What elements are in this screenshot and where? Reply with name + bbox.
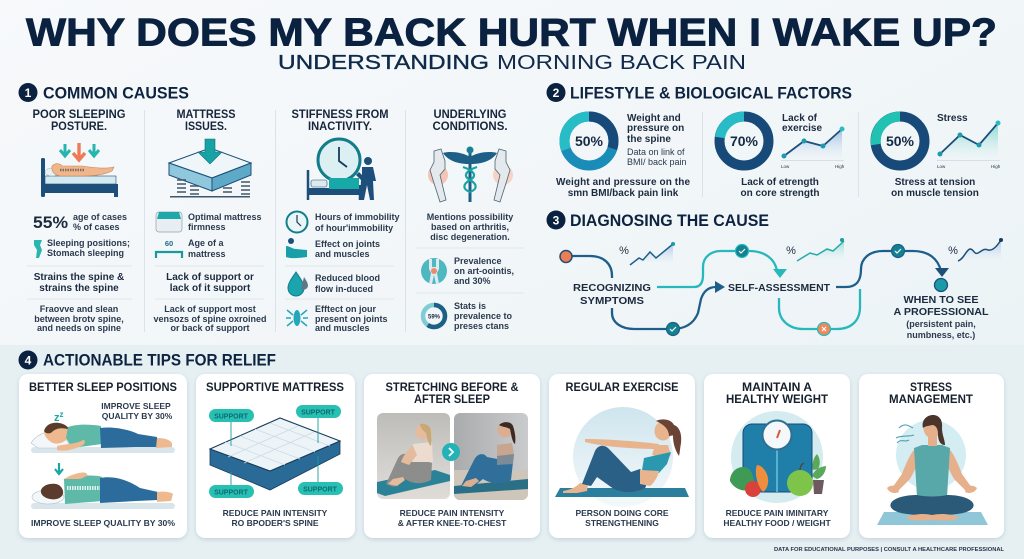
illustration: side sleeper	[31, 423, 175, 453]
step: when to see a professional: WHEN TO SEE	[904, 295, 979, 306]
column: stiffness from inactivity	[285, 107, 400, 333]
subtitle: UNDERSTANDING	[278, 51, 489, 74]
card: maintain a healthy weight	[704, 374, 850, 538]
stat: 55% of cases	[33, 212, 127, 232]
step: when to see a professional: A PROFESSIONAL	[894, 307, 988, 318]
heading: common causes: 1	[25, 86, 32, 100]
factor: weight	[556, 113, 690, 199]
arrow: down	[55, 463, 63, 474]
photo: after stretch	[454, 413, 528, 500]
card: maintain a healthy weight: REDUCE PAIN IMINITARY	[726, 508, 829, 518]
factor: weight: smn BMI/back pain link	[568, 188, 679, 199]
column: mattress issues: MATTRESS	[176, 107, 236, 121]
column: poor sleeping posture: POSTURE.	[51, 119, 107, 133]
step: when to see a professional: numbness, etc.)	[907, 330, 975, 340]
card: stretching	[364, 374, 540, 538]
factor: weight: pressure on	[627, 123, 684, 134]
icon: nerve joint	[286, 310, 308, 326]
column: underlying conditions: preses ctans	[454, 321, 509, 331]
column: stiffness from inactivity: present on joints	[315, 314, 388, 324]
column: stiffness from inactivity: Hours of immobility	[315, 212, 400, 222]
column: stiffness from inactivity: of hour'immobility	[315, 223, 393, 233]
column: mattress issues: firmness	[188, 222, 226, 232]
mini chart 2	[786, 238, 844, 261]
icon: small clock	[286, 212, 308, 232]
card: stress management: MANAGEMENT	[889, 394, 973, 406]
factor: stress: Stress	[937, 113, 968, 124]
labels: support pills: SUPPORT	[214, 490, 249, 496]
card: regular exercise: STRENGTHENING	[585, 518, 659, 528]
column: poor sleeping posture: Strains the spine &	[34, 272, 124, 283]
card: stress management: STRESS	[910, 382, 952, 394]
stat: 55% of cases: age of cases	[73, 212, 127, 222]
card: supportive mattress: REDUCE PAIN INTENSITY	[223, 508, 328, 518]
icon: resting person	[286, 238, 307, 258]
panel: common causes	[18, 83, 524, 333]
illustration: mattress	[210, 418, 340, 490]
card: stress management	[859, 374, 1004, 538]
card: stretching: AFTER SLEEP	[414, 394, 490, 406]
chart: stress trend line: Low	[937, 164, 946, 169]
chart: exercise trend line: High	[835, 164, 845, 169]
factor: stress	[876, 113, 1001, 199]
column: mattress issues: lack of it support	[170, 283, 251, 294]
column: underlying conditions: Stats is	[454, 301, 486, 311]
heading: lifestyle factors: LIFESTYLE & BIOLOGICAL FACTORS	[570, 84, 852, 102]
node: end	[934, 278, 948, 292]
chart: 59% donut: 59%	[428, 314, 441, 320]
step: when to see a professional	[894, 295, 988, 340]
illustration: core exercise	[555, 407, 689, 507]
column: stiffness from inactivity: flow in-duced	[315, 284, 373, 294]
stat: 55% of cases: % of cases	[73, 222, 120, 232]
icon: person in bed with arrows	[41, 143, 118, 197]
footer note: DATA FOR EDUCATIONAL PURPOSES | CONSULT A HEALTHCARE PROFESSIONAL	[774, 547, 1005, 553]
labels: support pills	[209, 405, 343, 498]
card: better sleep positions	[19, 374, 187, 538]
panel: actionable tips	[18, 350, 1005, 553]
column: poor sleeping posture: Fraovve and slean	[40, 304, 118, 314]
chart: stress trend line	[937, 120, 1001, 169]
heading: common causes: COMMON CAUSES	[43, 84, 189, 102]
labels: support pills: SUPPORT	[303, 486, 338, 494]
factor: weight: Weight and pressure on the	[556, 177, 690, 188]
heading: lifestyle factors: 2	[553, 86, 560, 100]
heading: diagnosing: 3	[553, 214, 560, 228]
node: cross	[818, 322, 830, 336]
chart: 50% donut stress: 50%	[886, 133, 915, 149]
column: mattress issues: Lack of support or	[166, 272, 254, 283]
column: mattress issues: Age of a	[188, 238, 224, 248]
column: mattress issues: Lack of support most	[164, 304, 256, 314]
node: check 3	[892, 244, 904, 258]
column: stiffness from inactivity: and muscles	[315, 249, 370, 259]
card: regular exercise	[549, 374, 695, 538]
chart: 59% donut	[423, 305, 445, 327]
illustration: back sleeper	[31, 472, 175, 509]
card: supportive mattress	[196, 374, 355, 538]
panel: lifestyle and biological factors	[546, 83, 1001, 199]
icon: knee joint	[421, 258, 447, 284]
icon: mattress age	[156, 239, 182, 258]
mini chart 1	[619, 242, 675, 265]
chart: exercise trend line	[781, 126, 845, 169]
mini chart 3	[948, 238, 1003, 262]
column: mattress issues: mattress	[188, 249, 226, 259]
illustration: meditating person	[877, 415, 988, 525]
icon: compressed mattress on springs	[169, 139, 251, 198]
card: supportive mattress: RO BPODER'S SPINE	[231, 518, 319, 528]
factor: exercise: Lack of etrength	[741, 177, 819, 188]
column: underlying conditions: and 30%	[454, 276, 491, 286]
step: recognizing symptoms: SYMPTOMS	[580, 295, 644, 307]
heading: actionable tips: 4	[25, 354, 32, 368]
column: underlying conditions: CONDITIONS.	[432, 119, 508, 133]
factor: exercise: Lack of	[782, 113, 818, 124]
chart: 50% donut: 50%	[575, 133, 604, 149]
icon: spine figure	[34, 240, 42, 258]
column: poor sleeping posture: Sleeping positions;	[47, 238, 130, 248]
factor: weight: Data on link of	[627, 147, 685, 157]
column: underlying conditions	[416, 107, 524, 331]
column: stiffness from inactivity: Reduced blood	[315, 273, 380, 283]
node: check 2	[736, 244, 748, 258]
mini chart 1: %	[619, 245, 629, 257]
factor: exercise	[720, 113, 845, 199]
mini chart 3: %	[948, 245, 958, 257]
factor: weight: Weight and	[627, 113, 681, 124]
column: underlying conditions: on art-oointis,	[454, 266, 514, 276]
node: start	[560, 250, 572, 262]
column: underlying conditions: Mentions possibility	[427, 212, 513, 222]
panel: diagnosing the cause	[546, 210, 1003, 340]
icon: zzz: z	[54, 412, 60, 424]
card: stretching: REDUCE PAIN INTENSITY	[400, 508, 505, 518]
photo: before stretch	[377, 413, 450, 499]
chart: 70% donut: 70%	[730, 133, 759, 149]
column: stiffness from inactivity: STIFFNESS FROM	[292, 107, 388, 121]
chart: stress trend line: High	[991, 164, 1001, 169]
column: stiffness from inactivity: INACTIVITY.	[308, 119, 372, 133]
arrow: teal down	[773, 269, 787, 278]
chart: exercise trend line: Low	[781, 164, 790, 169]
factor: exercise: exercise	[782, 123, 822, 134]
icon: arrow button	[442, 443, 460, 461]
card: regular exercise: REGULAR EXERCISE	[566, 382, 679, 394]
card: better sleep positions: BETTER SLEEP POSITIONS	[29, 382, 177, 394]
icon: zzz: z	[60, 410, 64, 419]
factor: weight: BMI/ back pain	[627, 157, 687, 167]
factor: weight: the spine	[627, 134, 671, 145]
card: maintain a healthy weight: MAINTAIN A	[742, 382, 812, 394]
icon: mattress age: 60	[165, 239, 173, 248]
card: maintain a healthy weight: HEALTHY FOOD / WEIGHT	[723, 518, 831, 528]
card: better sleep positions: IMPROVE SLEEP	[101, 401, 171, 411]
subtitle	[278, 51, 746, 74]
column: underlying conditions: prevalence to	[454, 311, 513, 321]
step: when to see a professional: (persistent pain,	[906, 319, 976, 329]
labels: support pills: SUPPORT	[301, 410, 336, 416]
heading: actionable tips: ACTIONABLE TIPS FOR RELIEF	[43, 350, 276, 370]
factor: stress: on muscle tension	[891, 188, 979, 199]
flowchart paths	[572, 251, 941, 329]
food: vegetables	[730, 454, 826, 497]
column: stiffness from inactivity: Efftect on jour	[315, 304, 376, 314]
icon: caduceus and joints	[428, 146, 513, 202]
column: underlying conditions: Prevalence	[454, 256, 502, 266]
column: mattress issues: or back of support	[170, 323, 250, 333]
card: stretching: & AFTER KNEE-TO-CHEST	[398, 518, 507, 528]
factor: exercise: on core strength	[741, 188, 819, 199]
heading: diagnosing: DIAGNOSING THE CAUSE	[570, 211, 769, 230]
stat: 55% of cases: 55%	[33, 214, 68, 232]
labels: support pills: SUPPORT	[214, 414, 249, 420]
column: poor sleeping posture: between brotv spine,	[34, 314, 124, 324]
column: poor sleeping posture: Stomach sleeping	[47, 248, 124, 258]
card: better sleep positions: IMPROVE SLEEP QUALITY BY 30%	[31, 518, 175, 528]
icon: mattress firmness	[156, 212, 182, 232]
subtitle: MORNING BACK PAIN	[497, 51, 746, 74]
card: maintain a healthy weight: HEALTHY WEIGHT	[726, 394, 828, 406]
column: mattress issues: vensozs of spine oxroined	[153, 314, 267, 324]
card: stretching: STRETCHING BEFORE &	[386, 382, 518, 394]
step: recognizing symptoms	[573, 282, 651, 307]
arrow: to self-assessment	[715, 281, 725, 293]
column: poor sleeping posture: POOR SLEEPING	[32, 107, 126, 121]
column: underlying conditions: UNDERLYING	[434, 107, 506, 121]
icon: blood drops	[288, 272, 308, 296]
column: stiffness from inactivity: Effect on joints	[315, 239, 380, 249]
column: mattress issues: ISSUES.	[185, 119, 227, 133]
node: check 1	[666, 322, 680, 336]
title: WHY DOES MY BACK HURT WHEN I WAKE UP?	[26, 12, 997, 54]
column: stiffness from inactivity: and muscles	[315, 323, 370, 333]
mini chart 2: %	[786, 245, 796, 257]
step: self-assessment: SELF-ASSESSMENT	[728, 282, 831, 294]
card: regular exercise: PERSON DOING CORE	[575, 508, 669, 518]
column: underlying conditions: disc degeneration.	[430, 232, 510, 242]
card: supportive mattress: SUPPORTIVE MATTRESS	[206, 382, 344, 394]
column: poor sleeping posture	[27, 107, 132, 333]
step: recognizing symptoms: RECOGNIZING	[573, 282, 651, 294]
factor: stress: Stress at tension	[895, 177, 975, 188]
column: mattress issues	[153, 107, 267, 333]
column: poor sleeping posture: strains the spine	[39, 283, 119, 294]
column: poor sleeping posture: and needs on spine	[37, 323, 121, 333]
illustration: scale with food	[730, 411, 826, 503]
icon: clock, bed and person	[308, 139, 376, 200]
arrow: to professional	[935, 268, 949, 277]
column: underlying conditions: based on arthritis,	[431, 222, 509, 232]
column: mattress issues: Optimal mattress	[188, 212, 262, 222]
card: better sleep positions: QUALITY BY 30%	[102, 411, 173, 421]
